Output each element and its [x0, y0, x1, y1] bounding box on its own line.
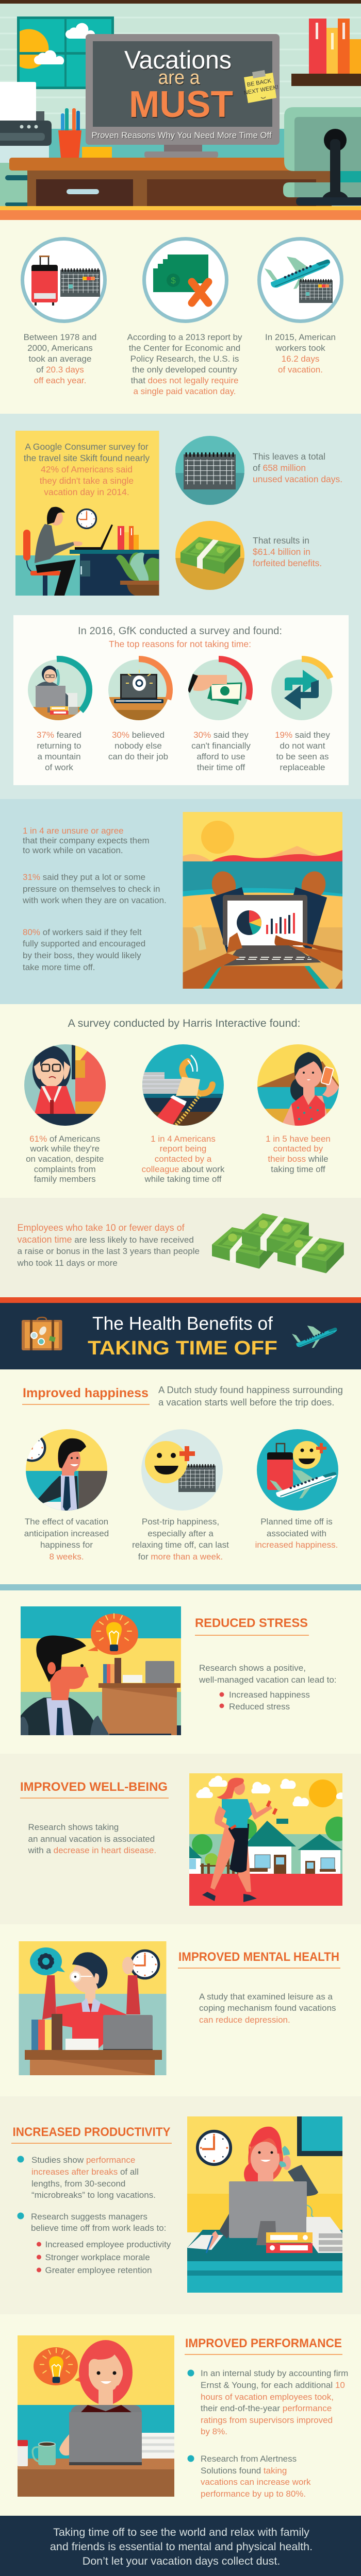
- text block: left stats: 1 in 4 are unsure or agree: [23, 826, 124, 836]
- panel: increased productivity: “microbreaks” to long vacations.: [31, 2190, 156, 2200]
- office chair: [283, 107, 361, 206]
- stat: 1 in 4 contacted by colleague: report being: [160, 1144, 206, 1154]
- panel: Skift survey: A Google Consumer survey for: [25, 442, 149, 452]
- stat: 1 in 4 contacted by colleague: colleague about work: [142, 1164, 225, 1174]
- donut: 19% replaceable: replaceable: [280, 762, 325, 772]
- panel: increased productivity: lengths, from 30-second: [31, 2179, 125, 2189]
- stat: 61% work on vacation: on vacation, despite: [26, 1154, 104, 1164]
- panel: GfK survey: The top reasons for not taking time:: [109, 639, 251, 649]
- title: [124, 46, 233, 125]
- happiness item: anticipation: [19, 1429, 109, 1562]
- stat: no paid vacation: Policy Research, the U.S. is: [130, 354, 239, 364]
- title: MUST: [129, 84, 233, 125]
- panel: improved well-being: IMPROVED WELL-BEING: [20, 1780, 168, 1794]
- illustration: man with raised arms: [19, 1941, 166, 2075]
- panel: reduced stress: REDUCED STRESS: [195, 1616, 308, 1630]
- heading: improved happiness: a vacation starts well before the trip does.: [158, 1397, 334, 1408]
- panel: increased productivity: [11, 2116, 342, 2293]
- stat: 61% work on vacation: 61% of Americans: [29, 1134, 100, 1144]
- panel: improved mental health: IMPROVED MENTAL HEALTH: [178, 1950, 339, 1964]
- panel: reduced stress: Reduced stress: [229, 1702, 290, 1711]
- happiness item: post-trip: [132, 1429, 229, 1562]
- stat: 61% work on vacation: [24, 1044, 106, 1184]
- stat: 16.2 days: workers took: [275, 343, 325, 353]
- text block: left stats: to work while on vacation.: [23, 845, 123, 855]
- panel: improved mental health: can reduce depression.: [199, 2015, 290, 2025]
- printer: [0, 82, 52, 206]
- stat: 20.3 days: 2000, Americans: [27, 343, 93, 353]
- panel: increased productivity: Greater employee retention: [45, 2265, 152, 2275]
- panel: improved performance: by 8%.: [201, 2427, 227, 2436]
- heading: improved happiness: A Dutch study found happiness surrounding: [158, 1384, 343, 1395]
- window: [9, 16, 114, 89]
- illustration: laptop on the beach: [183, 812, 342, 989]
- stat: 61% work on vacation: complaints from: [34, 1164, 96, 1174]
- donut: 30% nobody else: 30% believed: [112, 730, 165, 740]
- donut: 30% nobody else: can do their job: [108, 752, 168, 761]
- panel: improved performance: their end-of-the-year performance: [201, 2403, 332, 2413]
- illustration: tired worker at desk: [15, 507, 159, 596]
- stat: 16.2 days: In 2015, American: [265, 332, 336, 342]
- desk: [9, 158, 332, 206]
- panel: improved well-being: Research shows taking: [28, 1822, 119, 1832]
- icon: cash stack circle: [175, 521, 244, 591]
- sticky note: BE BACK: [247, 78, 272, 88]
- panel: improved well-being: with a decrease in heart disease.: [28, 1845, 156, 1855]
- section background: unused days: [0, 414, 361, 799]
- stat: 1 in 4 contacted by colleague: while taking time off: [144, 1174, 222, 1184]
- stat: 16.2 days: 16.2 days: [282, 354, 319, 364]
- stat: no paid vacation: a single paid vacation day.: [133, 386, 236, 396]
- icon: suitcase, smiley and plane: [257, 1429, 338, 1511]
- happiness item: planned time off: increased happiness.: [255, 1540, 338, 1550]
- panel: 61.4 billion forfeited: $61.4 billion in: [253, 547, 310, 557]
- donut: 37% mountain of work: returning to: [37, 741, 81, 751]
- panel: raises and bonuses: who took 11 days or more: [17, 1258, 118, 1268]
- panel: increased productivity: believe time off from work leads to:: [31, 2223, 166, 2233]
- panel: reduced stress: Research shows a positive,: [199, 1663, 306, 1673]
- panel: increased productivity: increases after breaks of all: [31, 2167, 139, 2177]
- sticky note: [243, 70, 279, 103]
- panel: increased productivity: Increased employee productivity: [45, 2240, 171, 2249]
- panel: reduced stress: [21, 1606, 336, 1735]
- panel: 61.4 billion forfeited: forfeited benefits.: [253, 558, 322, 568]
- stat: no paid vacation: [127, 239, 242, 396]
- stat: no paid vacation: the only developed country: [132, 365, 237, 375]
- donut: 37% mountain of work: of work: [45, 762, 73, 772]
- shelf with books: [291, 19, 361, 86]
- panel: Skift survey: the travel site Skift found nearly: [24, 453, 150, 463]
- panel: 658 million unused days: [175, 436, 342, 506]
- stat: 61% work on vacation: family members: [34, 1174, 96, 1184]
- panel: improved performance: In an internal study by accounting firm: [201, 2368, 348, 2378]
- donut: 37% mountain of work: [26, 659, 93, 772]
- panel: reduced stress: Increased happiness: [229, 1690, 310, 1700]
- text block: left stats: by their boss, they would likely: [23, 951, 141, 960]
- stat: 20.3 days: of 20.3 days: [36, 365, 84, 375]
- illustration: woman at laptop: [18, 2335, 174, 2497]
- text block: left stats: 31% said they put a lot or some: [23, 872, 145, 882]
- stat: no paid vacation: the Center for Economic and: [129, 343, 240, 353]
- panel: improved well-being: an annual vacation is associated: [28, 1834, 155, 1844]
- panel: conclusion: Don’t let your vacation days collect dust.: [83, 2555, 280, 2567]
- illustration: woman exercising: [189, 1773, 350, 1906]
- donut: 30% nobody else: [108, 659, 170, 761]
- panel: improved mental health: A study that examined leisure as a: [199, 1992, 333, 2002]
- heading: improved happiness: Improved happiness: [23, 1386, 149, 1400]
- donut: 30% cannot afford: [188, 659, 251, 772]
- panel: reduced stress: well-managed vacation can lead to:: [199, 1675, 336, 1685]
- panel: improved mental health: [19, 1941, 340, 2075]
- title: are a: [158, 67, 200, 89]
- stat: no paid vacation: that does not legally require: [131, 376, 238, 385]
- stat: 20.3 days: [23, 239, 105, 385]
- panel: improved performance: vacations can increase work: [201, 2477, 311, 2487]
- happiness item: anticipation: The effect of vacation: [25, 1517, 108, 1527]
- icon: money with X: $: [171, 276, 176, 285]
- icon: money with X: [144, 239, 227, 321]
- stat: 20.3 days: took an average: [29, 354, 91, 364]
- banner: health benefits: TAKING TIME OFF: [88, 1337, 277, 1359]
- panel: conclusion: Taking time off to see the world and relax with family: [53, 2526, 309, 2538]
- icon: suitcase: [22, 1317, 62, 1350]
- stat: 1 in 5 contacted by boss: taking time off: [271, 1164, 325, 1174]
- donut: 37% mountain of work: a mountain: [37, 752, 81, 761]
- happiness item: post-trip: relaxing time off, can last: [132, 1540, 229, 1550]
- panel: Skift survey: 42% of Americans said: [41, 464, 133, 474]
- panel: Skift survey: vacation day in 2014.: [44, 487, 129, 497]
- donut: 30% cannot afford: their time off: [197, 762, 245, 772]
- stat: no paid vacation: According to a 2013 report by: [127, 332, 242, 342]
- panel: improved performance: Solutions found taking: [201, 2466, 287, 2476]
- donut: 19% replaceable: to be seen as: [276, 752, 329, 761]
- panel: improved performance: [18, 2335, 348, 2499]
- panel: 61.4 billion forfeited: That results in: [253, 535, 309, 546]
- panel: raises and bonuses: vacation time are less likely to have received: [18, 1234, 194, 1245]
- text block: left stats: [22, 826, 167, 972]
- stat: 20.3 days: Between 1978 and: [24, 332, 96, 342]
- panel: working on vacation: [0, 799, 361, 1004]
- stat: 1 in 5 contacted by boss: contacted by: [273, 1144, 323, 1154]
- donut: 37% mountain of work: 37% feared: [37, 730, 81, 740]
- panel: increased productivity: Studies show performance: [31, 2155, 135, 2165]
- icon: woman on smartphone: [257, 1044, 340, 1126]
- panel: conclusion: [0, 2516, 361, 2576]
- stat: 16.2 days: of vacation.: [278, 365, 323, 375]
- panel: conclusion: and friends is essential to mental and physical health.: [50, 2540, 313, 2553]
- panel: GfK survey: [13, 615, 349, 785]
- donut: 19% replaceable: do not want: [280, 741, 325, 751]
- icon: plane: [292, 1326, 337, 1348]
- text block: left stats: take more time off.: [23, 962, 95, 972]
- donut: 30% cannot afford: can't financially: [191, 741, 251, 751]
- icon: plane and calendar: [259, 239, 341, 321]
- computer monitor: [86, 34, 280, 158]
- panel: improved performance: ratings from supervisors improved: [201, 2415, 333, 2425]
- happiness item: planned time off: [255, 1429, 338, 1550]
- panel: improved performance: IMPROVED PERFORMANCE: [185, 2336, 342, 2350]
- heading: improved happiness: [22, 1384, 343, 1408]
- panel: improved performance: performance by up to 80%.: [201, 2489, 306, 2499]
- panel: improved mental health: coping mechanism found vacations: [199, 2003, 336, 2013]
- donut: 30% nobody else: nobody else: [114, 741, 162, 751]
- happiness item: post-trip: Post-trip happiness,: [142, 1517, 219, 1527]
- pencil cup: [58, 108, 112, 158]
- happiness item: planned time off: associated with: [267, 1529, 326, 1538]
- text block: left stats: with work when they are on vacation.: [22, 895, 167, 905]
- stat: 61% work on vacation: work while they're: [29, 1144, 100, 1154]
- panel: 61.4 billion forfeited: [175, 521, 322, 591]
- panel: 658 million unused days: of 658 million: [253, 463, 306, 473]
- stat: 20.3 days: off each year.: [34, 376, 86, 385]
- banner: health benefits: [0, 1297, 361, 1369]
- icon: stressed woman: [24, 1044, 106, 1126]
- icon: smiling businessman: [19, 1429, 107, 1512]
- happiness item: anticipation: 8 weeks.: [49, 1552, 84, 1562]
- stat: 1 in 5 contacted by boss: 1 in 5 have been: [266, 1134, 331, 1144]
- stat: 1 in 4 contacted by colleague: [142, 1044, 225, 1184]
- subtitle: Proven Reasons Why You Need More Time Off: [92, 130, 272, 140]
- header office scene: [0, 0, 361, 220]
- panel: improved performance: Ernst & Young, for each additional 10: [201, 2380, 345, 2390]
- text block: left stats: pressure on themselves to check in: [23, 884, 160, 894]
- heading: In 2016, GfK conducted a survey and found:: [78, 625, 282, 637]
- happiness item: anticipation: happiness for: [40, 1540, 93, 1550]
- stat: 16.2 days: [259, 239, 341, 375]
- stat: 1 in 4 contacted by colleague: 1 in 4 Americans: [151, 1134, 216, 1144]
- donut: 19% replaceable: [271, 659, 332, 772]
- happiness item: post-trip: especially after a: [147, 1529, 214, 1538]
- panel: Skift survey: they didn't take a single: [40, 476, 134, 486]
- text block: left stats: fully supported and encouraged: [23, 939, 145, 948]
- donut: 19% replaceable: 19% said they: [275, 730, 330, 740]
- heading: The Health Benefits of: [92, 1313, 273, 1334]
- stat: 1 in 5 contacted by boss: [257, 1044, 340, 1174]
- icon: smiley and calendar: [141, 1429, 223, 1511]
- donut: 30% cannot afford: 30% said they: [193, 730, 249, 740]
- stat: 1 in 5 contacted by boss: their boss while: [268, 1154, 329, 1164]
- panel: raises and bonuses: a raise or bonus in the last 3 years than people: [18, 1246, 200, 1256]
- panel: increased productivity: Stronger workplace morale: [45, 2252, 150, 2262]
- illustration: man with idea: [21, 1606, 181, 1735]
- text block: left stats: that their company expects them: [23, 836, 150, 845]
- heading: Harris survey: A survey conducted by Harris Interactive found:: [68, 1018, 300, 1029]
- panel: 658 million unused days: unused vacation days.: [253, 474, 342, 484]
- panel: increased productivity: INCREASED PRODUCTIVITY: [12, 2125, 170, 2139]
- title: Vacations: [124, 46, 232, 74]
- panel: raises and bonuses: [0, 1198, 361, 1297]
- sticky note: NEXT WEEK!: [243, 84, 279, 96]
- icon: cash bricks: [212, 1213, 344, 1273]
- panel: raises and bonuses: Employees who take 10 or fewer days of: [18, 1223, 185, 1233]
- donut: 30% cannot afford: afford to use: [196, 752, 245, 761]
- stat: 1 in 4 contacted by colleague: contacted by a: [155, 1154, 212, 1164]
- panel: improved performance: hours of vacation employees took,: [201, 2392, 334, 2402]
- panel: improved well-being: [20, 1773, 342, 1906]
- panel: 658 million unused days: This leaves a total: [253, 451, 325, 462]
- panel: increased productivity: Research suggests managers: [31, 2212, 147, 2222]
- icon: suitcase and calendar: [23, 239, 105, 321]
- panel: improved performance: Research from Alertness: [201, 2454, 297, 2464]
- panel: Skift survey: [15, 431, 159, 596]
- happiness item: planned time off: Planned time off is: [260, 1517, 333, 1527]
- happiness item: anticipation: anticipation increased: [24, 1529, 109, 1538]
- text block: left stats: 80% of workers said if they felt: [23, 927, 142, 937]
- illustration: woman on the phone: [187, 2116, 342, 2293]
- icon: hand holding phone: [142, 1044, 225, 1126]
- icon: calendar circle: [175, 436, 244, 506]
- happiness item: post-trip: for more than a week.: [138, 1552, 223, 1562]
